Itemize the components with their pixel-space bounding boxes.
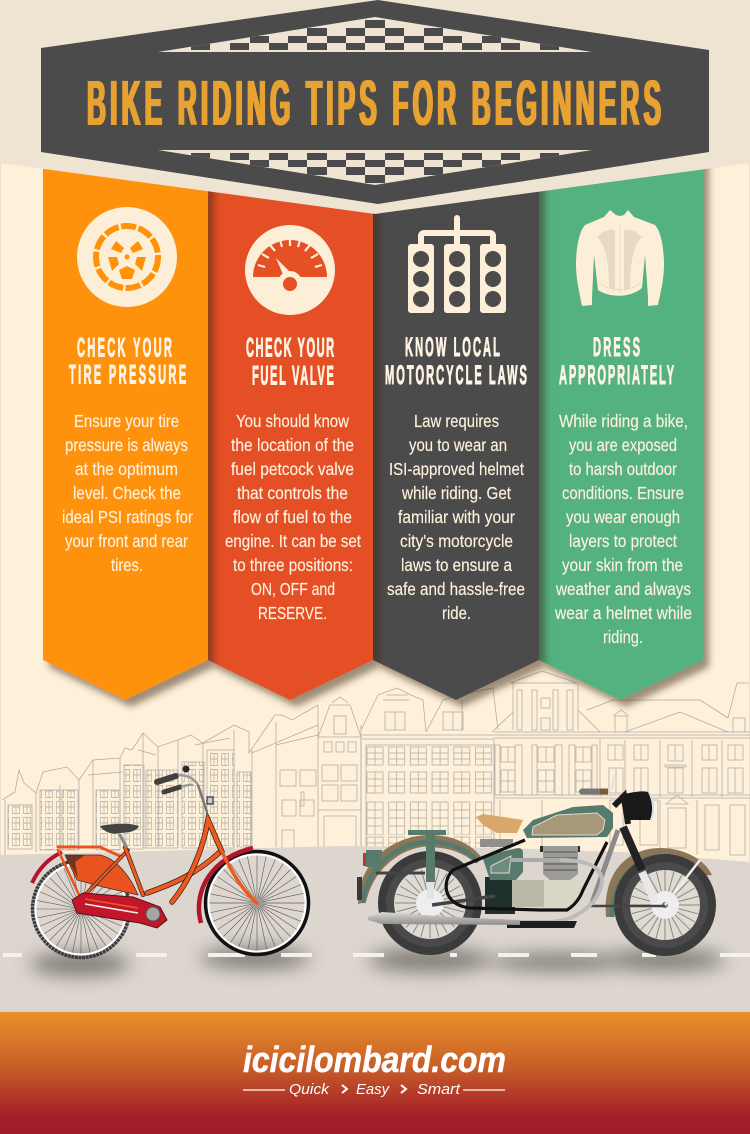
rear wheel <box>26 854 136 964</box>
road dashes <box>3 953 750 957</box>
top band <box>0 0 750 214</box>
road shadows <box>30 947 725 976</box>
heading: check your fuel valve: FUEL VALVE <box>252 362 334 391</box>
seat <box>476 814 523 833</box>
icon: traffic lights <box>408 218 506 313</box>
text: fuel valve: the location of the <box>231 435 354 455</box>
text: tire pressure: Ensure your tire <box>74 411 179 431</box>
text: dress appropriately <box>554 411 692 647</box>
front wheel <box>199 845 315 961</box>
text: fuel valve: engine. It can be set <box>225 531 361 551</box>
text: motorcycle laws: ride. <box>442 603 471 623</box>
text: motorcycle laws: safe and hassle-free <box>387 579 525 599</box>
front fork <box>623 827 642 870</box>
text: dress appropriately: riding. <box>603 627 643 647</box>
skyline illustration <box>2 671 750 855</box>
text: motorcycle laws: familiar with your <box>398 507 515 527</box>
footer tagline: Easy <box>356 1081 390 1098</box>
text: dress appropriately: you are exposed <box>569 435 677 455</box>
heading: check your fuel valve: CHECK YOUR <box>246 334 334 363</box>
footer tagline <box>243 1081 505 1098</box>
panel: know local motorcycle laws <box>373 140 539 700</box>
illustration: bicycle <box>26 766 315 964</box>
road <box>0 846 750 1012</box>
footer logo: icicilombard.com <box>243 1039 506 1080</box>
heading: know local motorcycle laws <box>385 334 527 391</box>
icon: fuel gauge <box>245 225 335 315</box>
panel: check your tire pressure <box>43 140 208 700</box>
text: fuel valve: ON, OFF and <box>251 579 335 599</box>
rear wheel <box>378 851 482 955</box>
heading: check your tire pressure: CHECK YOUR <box>77 334 172 363</box>
text: motorcycle laws: city's motorcycle <box>400 531 513 551</box>
text: dress appropriately: While riding a bike, <box>559 411 688 431</box>
headlight <box>620 791 653 820</box>
text: motorcycle laws: laws to ensure a <box>401 555 512 575</box>
text: tire pressure <box>62 411 193 575</box>
exhaust <box>500 860 602 922</box>
text: fuel valve <box>225 411 361 623</box>
footer tagline: Quick <box>289 1081 331 1098</box>
engine and frame <box>480 839 513 847</box>
chain guard <box>72 893 167 928</box>
banner <box>41 0 709 204</box>
heading: know local motorcycle laws: KNOW LOCAL <box>405 334 500 363</box>
text: dress appropriately: layers to protect <box>569 531 677 551</box>
title: BIKE RIDING TIPS FOR BEGINNERS <box>87 69 661 139</box>
front wheel <box>614 854 716 956</box>
text: dress appropriately: you wear enough <box>566 507 680 527</box>
text: tire pressure: ideal PSI ratings for <box>62 507 193 527</box>
text: fuel valve: RESERVE. <box>258 603 327 623</box>
text: tire pressure: pressure is always <box>65 435 188 455</box>
heading: check your tire pressure: TIRE PRESSURE <box>69 361 186 390</box>
text: dress appropriately: your skin from the <box>562 555 683 575</box>
text: tire pressure: your front and rear <box>65 531 188 551</box>
panel: check your fuel valve <box>208 140 373 700</box>
handlebar <box>157 766 213 804</box>
checkered triangle: bottom <box>158 150 592 185</box>
panel: dress appropriately <box>539 140 703 700</box>
checkered triangle: top <box>158 17 592 52</box>
text: motorcycle laws: while riding. Get <box>401 483 511 503</box>
text: dress appropriately: wear a helmet while <box>554 603 692 623</box>
text: motorcycle laws: you to wear an <box>409 435 507 455</box>
text: motorcycle laws: ISI-approved helmet <box>389 459 524 479</box>
crank <box>146 907 160 921</box>
front fender <box>606 848 712 917</box>
text: motorcycle laws <box>387 411 525 623</box>
heading: dress appropriately <box>559 334 674 391</box>
text: fuel valve: to three positions: <box>233 555 353 575</box>
footer tagline: Smart <box>417 1081 461 1098</box>
frame <box>58 785 257 903</box>
text: tire pressure: level. Check the <box>73 483 181 503</box>
rear fender <box>358 835 482 904</box>
text: tire pressure: at the optimum <box>75 459 178 479</box>
heading: check your tire pressure <box>69 334 186 390</box>
text: fuel valve: that controls the <box>237 483 348 503</box>
saddle <box>100 824 139 834</box>
icon: jacket <box>576 210 664 306</box>
heading: know local motorcycle laws: MOTORCYCLE LAWS <box>385 362 527 391</box>
illustration: motorcycle <box>357 775 716 956</box>
text: motorcycle laws: Law requires <box>414 411 499 431</box>
text: dress appropriately: weather and always <box>555 579 691 599</box>
handlebar grip <box>582 788 600 794</box>
icon: tire <box>77 207 177 307</box>
rear mudguard and skirt guard <box>32 852 62 883</box>
rear shock <box>426 835 435 882</box>
front mudguard <box>199 848 253 923</box>
text: fuel valve: You should know <box>236 411 349 431</box>
text: tire pressure: tires. <box>111 555 143 575</box>
fuel tank <box>523 805 613 838</box>
footer <box>0 1011 750 1134</box>
text: fuel valve: flow of fuel to the <box>233 507 352 527</box>
text: fuel valve: fuel petcock valve <box>231 459 354 479</box>
black frame tube <box>446 840 607 910</box>
text: dress appropriately: conditions. Ensure <box>562 483 684 503</box>
text: dress appropriately: to harsh outdoor <box>569 459 677 479</box>
heading: dress appropriately: DRESS <box>593 334 640 363</box>
heading: dress appropriately: APPROPRIATELY <box>559 362 674 391</box>
heading: check your fuel valve <box>246 334 334 391</box>
